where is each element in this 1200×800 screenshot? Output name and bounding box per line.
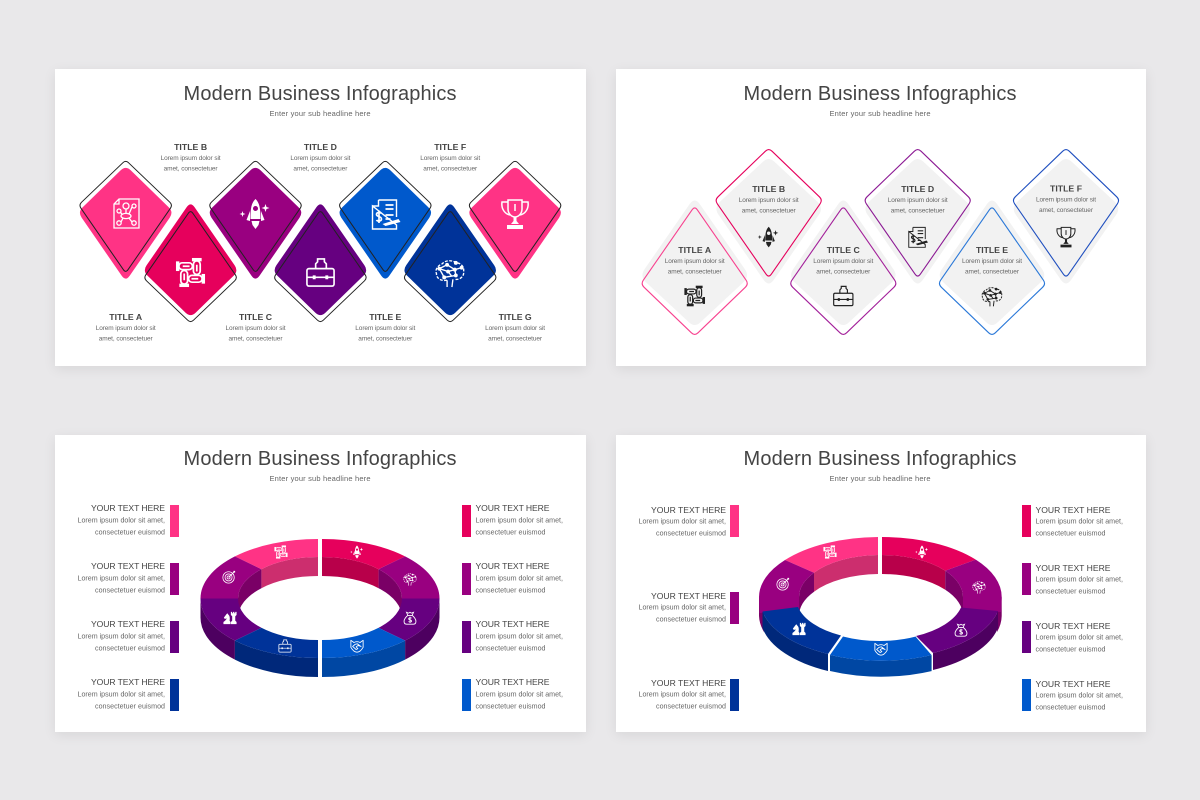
text block: title B: Lorem ipsum dolor sit: [161, 155, 221, 162]
icon: brain: [973, 582, 985, 594]
right legend item 4: Lorem ipsum dolor sit amet,: [1036, 692, 1123, 700]
left legend item 3: YOUR TEXT HERE: [651, 678, 726, 688]
text block: title D: amet, consectetuer: [891, 208, 946, 214]
segment: lower right dark purple: [379, 598, 440, 660]
text block: title E: amet, consectetuer: [358, 336, 413, 342]
left legend item 4: [78, 677, 179, 711]
icon: target: [777, 578, 789, 590]
left legend item 2: [638, 591, 739, 624]
text block: title A: amet, consectetuer: [99, 336, 154, 342]
text block: title A: [665, 245, 725, 276]
text block: title E: [962, 245, 1022, 276]
text block: title E: TITLE E: [976, 245, 1008, 255]
text block: title A: TITLE A: [109, 312, 143, 322]
right legend item 4: Lorem ipsum dolor sit amet,: [476, 690, 563, 698]
right legend item 1: consectetuer euismod: [1036, 530, 1106, 538]
text block: title C: TITLE C: [827, 245, 861, 255]
right legend item 2: [462, 561, 563, 595]
right legend item 1: [1022, 505, 1123, 538]
segment: bottom right blue: [322, 628, 405, 677]
right legend item 2: consectetuer euismod: [476, 586, 546, 594]
segment: top right red: [322, 539, 405, 588]
segment: top right red: [882, 537, 976, 590]
icon: brain network: [436, 261, 464, 287]
segment: lower left navy: [762, 607, 841, 671]
right legend item 2: Lorem ipsum dolor sit amet,: [1036, 576, 1123, 584]
left legend item 1: Lorem ipsum dolor sit amet,: [638, 518, 726, 526]
text block: title F: [420, 142, 480, 172]
text block: title E: TITLE E: [369, 312, 402, 322]
segment: top left pink: [785, 537, 878, 592]
text block: title E: Lorem ipsum dolor sit: [355, 325, 415, 332]
heading: panel 1 title: Modern Business Infographics: [184, 83, 456, 105]
icon: mind map document: [114, 199, 139, 228]
icon: briefcase: [834, 286, 853, 306]
left legend item 2: YOUR TEXT HERE: [651, 591, 726, 601]
text block: title B: [161, 142, 221, 172]
text block: title B: TITLE B: [174, 142, 207, 152]
left legend item 3: [638, 678, 739, 711]
right legend item 3: Lorem ipsum dolor sit amet,: [476, 632, 563, 640]
text block: title A: amet, consectetuer: [668, 268, 723, 276]
text block: title B: amet, consectetuer: [164, 166, 218, 172]
text block: title B: [739, 184, 799, 214]
sub headline: panel 4: Enter your sub headline here: [830, 474, 930, 483]
text block: title A: TITLE A: [678, 245, 712, 255]
left legend item 3: consectetuer euismod: [95, 644, 165, 652]
left legend item 1: YOUR TEXT HERE: [651, 505, 726, 515]
text block: title F: Lorem ipsum dolor sit: [1036, 196, 1096, 204]
colored outline kites: [642, 150, 1119, 334]
heading: panel 4 title: Modern Business Infographics: [744, 448, 1016, 470]
icon: trophy: [502, 200, 528, 229]
segment: upper right purple: [379, 556, 440, 618]
text block: title D: [290, 142, 351, 172]
icon: chess pieces: [223, 612, 237, 624]
sub headline: panel 1: Enter your sub headline here: [270, 109, 370, 118]
icon: brain: [404, 574, 416, 586]
text block: title C: Lorem ipsum dolor sit: [226, 325, 286, 332]
text block: title A: [96, 312, 156, 342]
right legend item 1: consectetuer euismod: [476, 528, 546, 536]
text block: title C: Lorem ipsum dolor sit: [813, 258, 873, 265]
icon: target: [223, 571, 235, 583]
icon: rocket: [758, 227, 778, 247]
icon: rocket: [240, 199, 270, 229]
text block: title G: [485, 312, 545, 342]
text block: title D: amet, consectetuer: [293, 166, 348, 172]
chart: eight segment 3D ring: [200, 539, 440, 677]
text block: title F: [1036, 184, 1096, 214]
icon: invoice: [909, 227, 928, 247]
left legend item 2: Lorem ipsum dolor sit amet,: [78, 574, 165, 582]
chart: seven segment 3D ring: [759, 537, 1002, 677]
sub headline: panel 3: Enter your sub headline here: [270, 474, 370, 483]
text block: title A: Lorem ipsum dolor sit: [665, 258, 725, 265]
icon: handshake: [351, 640, 363, 652]
right legend item 3: YOUR TEXT HERE: [476, 619, 550, 629]
left legend item 1: consectetuer euismod: [95, 528, 165, 536]
left legend item 1: YOUR TEXT HERE: [91, 503, 165, 513]
left legend item 4: consectetuer euismod: [95, 702, 165, 710]
left legend item 1: consectetuer euismod: [656, 530, 726, 538]
colored kite shapes: [80, 168, 561, 315]
icon: brain network: [982, 288, 1002, 306]
right legend item 1: Lorem ipsum dolor sit amet,: [476, 516, 563, 524]
right legend item 3: YOUR TEXT HERE: [1036, 621, 1111, 631]
text block: title B: amet, consectetuer: [742, 208, 797, 214]
right legend item 2: Lorem ipsum dolor sit amet,: [476, 574, 563, 582]
right legend item 2: YOUR TEXT HERE: [476, 561, 550, 571]
icon: briefcase: [279, 640, 291, 652]
text block: title F: amet, consectetuer: [423, 166, 478, 172]
right legend item 1: YOUR TEXT HERE: [476, 503, 550, 513]
grey kite shapes: [642, 159, 1118, 325]
right legend item 2: YOUR TEXT HERE: [1036, 563, 1111, 573]
icon: money bag: [955, 624, 967, 636]
text block: title D: Lorem ipsum dolor sit: [888, 197, 948, 204]
text block: title E: Lorem ipsum dolor sit: [962, 258, 1022, 265]
text block: title F: TITLE F: [434, 142, 466, 152]
icon: rocket: [350, 545, 363, 559]
icon: handshake: [875, 643, 887, 655]
icon: chess pieces: [792, 623, 806, 635]
right legend item 4: [462, 677, 563, 711]
text block: title G: TITLE G: [499, 312, 532, 322]
segment: lower right dark purple: [916, 608, 998, 670]
left legend item 1: [638, 505, 739, 538]
left legend item 1: Lorem ipsum dolor sit amet,: [78, 516, 165, 524]
right legend item 4: [1022, 679, 1123, 712]
text block: title A: Lorem ipsum dolor sit: [96, 325, 156, 332]
right legend item 4: YOUR TEXT HERE: [1036, 679, 1111, 689]
outline kite shapes: [80, 161, 561, 322]
left legend item 2: consectetuer euismod: [656, 616, 726, 624]
text block: title C: TITLE C: [239, 312, 273, 322]
right legend item 1: YOUR TEXT HERE: [1036, 505, 1111, 515]
text block: title E: [355, 312, 415, 342]
text block: title F: amet, consectetuer: [1039, 207, 1094, 214]
panel: diamond infographic colored: [55, 69, 586, 366]
icon: money bag: [404, 612, 416, 624]
text block: title B: TITLE B: [752, 184, 785, 194]
text block: title F: Lorem ipsum dolor sit: [420, 155, 480, 162]
text block: title C: [226, 312, 286, 342]
text block: title G: Lorem ipsum dolor sit: [485, 325, 545, 332]
right legend item 4: consectetuer euismod: [1036, 704, 1106, 712]
text block: title D: Lorem ipsum dolor sit: [290, 155, 351, 162]
icon: invoice: [372, 200, 400, 229]
right legend item 3: consectetuer euismod: [476, 644, 546, 652]
segment: top left pink: [235, 539, 318, 588]
left legend item 4: Lorem ipsum dolor sit amet,: [78, 690, 165, 698]
right legend item 2: consectetuer euismod: [1036, 588, 1106, 596]
left legend item 3: YOUR TEXT HERE: [91, 619, 165, 629]
text block: title D: TITLE D: [304, 142, 337, 152]
panel: eight segment ring: [55, 435, 586, 732]
left legend item 2: [78, 561, 179, 595]
segment: left purple: [759, 560, 814, 632]
left legend item 1: [78, 503, 179, 537]
sub headline: panel 2: Enter your sub headline here: [830, 109, 930, 118]
text block: title C: amet, consectetuer: [228, 336, 283, 342]
left legend item 3: Lorem ipsum dolor sit amet,: [638, 690, 726, 698]
panel: diamond infographic outlined: [616, 69, 1146, 366]
segment: bottom blue: [830, 636, 932, 677]
text block: title C: [813, 245, 873, 276]
right legend item 1: [462, 503, 563, 537]
right legend item 3: consectetuer euismod: [1036, 646, 1106, 654]
text block: title D: TITLE D: [901, 184, 934, 194]
text block: title B: Lorem ipsum dolor sit: [739, 197, 799, 204]
right legend item 4: YOUR TEXT HERE: [476, 677, 550, 687]
right legend item 2: [1022, 563, 1123, 596]
segment: bottom left navy: [235, 628, 318, 677]
text block: title G: amet, consectetuer: [488, 336, 543, 342]
heading: panel 2 title: Modern Business Infographics: [744, 83, 1016, 105]
heading: panel 3 title: Modern Business Infographics: [184, 448, 456, 470]
panel: seven segment ring: [616, 435, 1146, 732]
right legend item 3: Lorem ipsum dolor sit amet,: [1036, 634, 1123, 642]
right legend item 3: [462, 619, 563, 653]
segment: upper left purple: [200, 556, 261, 618]
left legend item 2: YOUR TEXT HERE: [91, 561, 165, 571]
text block: title D: [888, 184, 948, 214]
right legend item 4: consectetuer euismod: [476, 702, 546, 710]
icon: trophy: [1057, 227, 1075, 247]
icon: team hands: [823, 545, 837, 559]
right legend item 1: Lorem ipsum dolor sit amet,: [1036, 518, 1123, 526]
text block: title F: TITLE F: [1050, 184, 1082, 194]
icon: team hands: [684, 286, 705, 306]
left legend item 2: Lorem ipsum dolor sit amet,: [638, 604, 726, 612]
icon: rocket: [915, 545, 928, 559]
left legend item 3: consectetuer euismod: [656, 702, 726, 710]
left legend item 3: Lorem ipsum dolor sit amet,: [78, 632, 165, 640]
text block: title E: amet, consectetuer: [965, 268, 1020, 276]
segment: right purple: [945, 560, 1002, 632]
text block: title C: amet, consectetuer: [816, 268, 871, 276]
icon: team hands: [176, 258, 205, 287]
left legend item 2: consectetuer euismod: [95, 586, 165, 594]
segment: lower left dark purple: [200, 598, 261, 660]
left legend item 3: [78, 619, 179, 653]
right legend item 3: [1022, 621, 1123, 654]
icon: briefcase: [307, 259, 334, 286]
left legend item 4: YOUR TEXT HERE: [91, 677, 165, 687]
icon: team hands: [274, 545, 288, 559]
